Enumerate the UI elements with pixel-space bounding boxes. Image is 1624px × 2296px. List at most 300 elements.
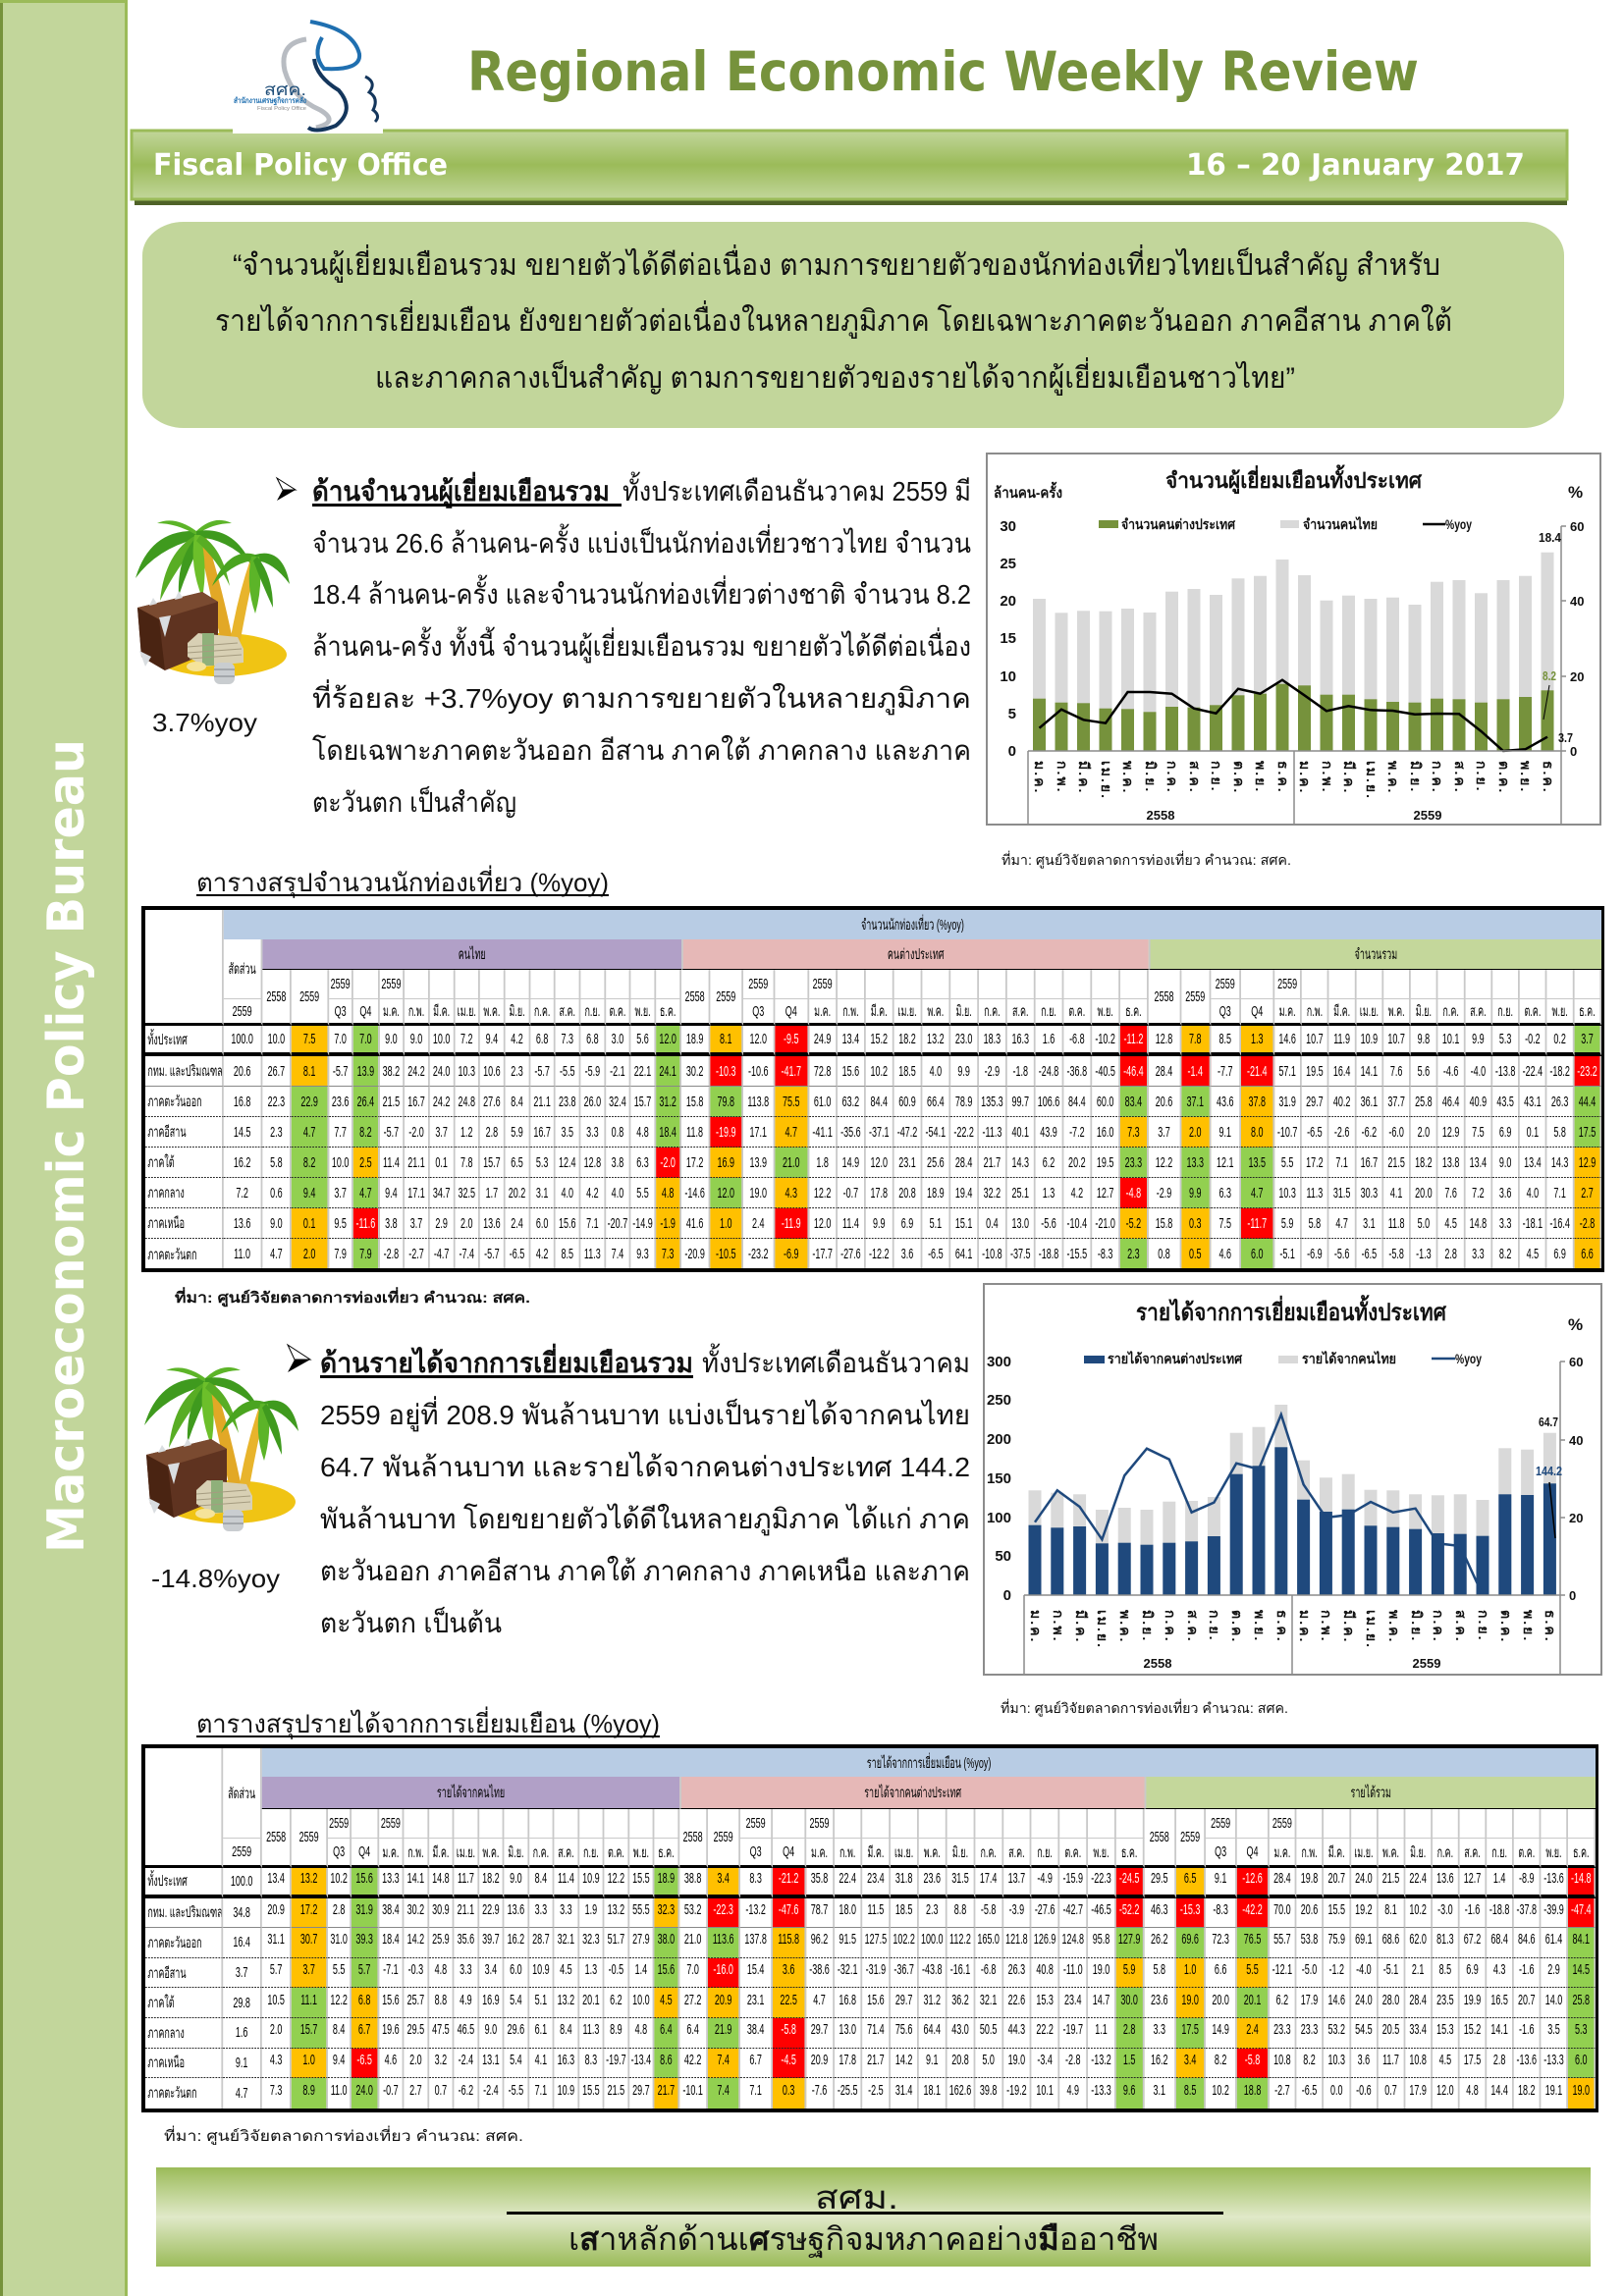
table: tourist numbers (%yoy): 3.6 <box>901 1246 913 1262</box>
month labels: ต.ค. <box>1229 1610 1245 1643</box>
table: tourist numbers (%yoy): 79.8 <box>717 1094 734 1109</box>
table: tourism receipts (%yoy): 20.9 <box>811 2052 828 2068</box>
month labels: พ.ย. <box>1252 1610 1268 1642</box>
table: tourist numbers (%yoy): มี.ค. <box>871 1003 888 1020</box>
table: tourism receipts (%yoy): ก.ค. <box>1437 1843 1453 1861</box>
table: tourist numbers (%yoy): -5.5 <box>560 1062 574 1080</box>
table: tourism receipts (%yoy): 23.4 <box>867 1870 885 1887</box>
table: tourist numbers (%yoy): 18.9 <box>927 1184 945 1201</box>
table: tourist numbers (%yoy): 83.4 <box>1125 1094 1142 1109</box>
table: tourism receipts (%yoy): ภาคอีสาน <box>147 1965 187 1982</box>
table: tourist numbers (%yoy): ภาคตะวันออก <box>147 1094 202 1110</box>
table: tourism receipts (%yoy): ม.ค. <box>1273 1843 1290 1861</box>
table: tourism receipts (%yoy): 4.7 <box>813 1992 826 2008</box>
table: tourist numbers (%yoy): 31.9 <box>1278 1094 1296 1109</box>
chart: visitors nationwide <box>987 454 1600 825</box>
table: tourism receipts (%yoy): 16.8 <box>839 1992 856 2008</box>
table: tourism receipts (%yoy): 23.3 <box>1301 2021 1318 2038</box>
table: tourism receipts (%yoy): 11.5 <box>867 1901 884 1918</box>
month labels: ส.ค. <box>1453 1610 1469 1643</box>
table: tourism receipts (%yoy): 1.4 <box>1493 1870 1505 1887</box>
table: tourism receipts (%yoy): 55.7 <box>1273 1931 1291 1948</box>
table: tourism receipts (%yoy): พ.ค. <box>1382 1843 1399 1861</box>
table: tourist numbers (%yoy): 106.6 <box>1038 1094 1059 1109</box>
table: tourism receipts (%yoy): 0.3 <box>783 2082 794 2099</box>
left axis labels: 20 <box>1000 593 1016 610</box>
table: tourist numbers (%yoy): -37.5 <box>1010 1246 1030 1262</box>
table: tourism receipts (%yoy): 16.5 <box>1490 1992 1508 2008</box>
table: tourism receipts (%yoy): 2559 <box>1211 1815 1230 1832</box>
table: tourism receipts (%yoy): -5.0 <box>1302 1961 1317 1978</box>
table: tourist numbers (%yoy): 5.8 <box>1553 1123 1566 1141</box>
table: tourism receipts (%yoy): 4.3 <box>270 2052 282 2068</box>
table: tourism receipts (%yoy): 13.6 <box>508 1901 524 1918</box>
table: tourist numbers (%yoy): 13.4 <box>1524 1154 1542 1170</box>
table: tourist numbers (%yoy): 4.0 <box>930 1062 942 1080</box>
table: tourism receipts (%yoy): 2559 <box>1272 1815 1292 1832</box>
table: tourism receipts (%yoy): 4.3 <box>1493 1961 1505 1978</box>
table: tourist numbers (%yoy): 10.7 <box>1387 1031 1405 1047</box>
table: tourist numbers (%yoy): 14.1 <box>1361 1062 1378 1080</box>
table: tourist numbers (%yoy): -27.6 <box>840 1246 861 1262</box>
month labels: ม.ค. <box>1028 1610 1044 1643</box>
table: tourist numbers (%yoy): 15.8 <box>686 1094 703 1109</box>
month labels: พ.ค. <box>1117 1610 1133 1643</box>
table: tourism receipts (%yoy): -19.7 <box>606 2052 626 2068</box>
table: tourism receipts (%yoy): ทั้งประเทศ <box>147 1873 188 1890</box>
month labels: ส.ค. <box>1452 761 1468 794</box>
table: tourism receipts (%yoy): 16.2 <box>508 1931 524 1948</box>
table: tourism receipts (%yoy): มิ.ย. <box>1410 1843 1426 1861</box>
table: tourism receipts (%yoy): 13.7 <box>1008 1870 1025 1887</box>
data labels: 8.2 <box>1543 668 1556 683</box>
table: tourist numbers (%yoy): 0.2 <box>1553 1031 1566 1047</box>
table: tourist numbers (%yoy): 16.9 <box>717 1154 734 1170</box>
header band: Fiscal Policy Office and date <box>132 131 1567 205</box>
table: tourist numbers (%yoy): -21.0 <box>1095 1215 1115 1231</box>
month labels: ธ.ค. <box>1274 1610 1290 1643</box>
table: tourism receipts (%yoy): พ.ค. <box>924 1843 941 1861</box>
table: tourist numbers (%yoy): 13.2 <box>927 1031 945 1047</box>
table: tourist numbers (%yoy): ภาคกลาง <box>147 1185 185 1201</box>
month labels: มิ.ย. <box>1140 1610 1156 1642</box>
table: tourist numbers (%yoy): 100.0 <box>231 1031 253 1047</box>
table: tourism receipts (%yoy): 54.5 <box>1355 2021 1373 2038</box>
table: tourist numbers (%yoy): ภาคเหนือ <box>147 1215 185 1232</box>
table: tourist numbers (%yoy): -23.2 <box>1577 1062 1597 1080</box>
table: tourist numbers (%yoy): 3.7 <box>435 1123 448 1141</box>
table: tourist numbers (%yoy): -19.9 <box>716 1123 736 1141</box>
table: tourist numbers (%yoy): จำนวนนักท่องเที่ยว (%yoy) <box>861 917 964 934</box>
table: tourist numbers (%yoy): มี.ค. <box>1333 1003 1350 1020</box>
table: tourist numbers (%yoy): -4.7 <box>434 1246 449 1262</box>
table: tourist numbers (%yoy): 3.7 <box>410 1215 422 1231</box>
table: tourist numbers (%yoy): 43.6 <box>1217 1094 1233 1109</box>
table: tourist numbers (%yoy): ส.ค. <box>1470 1003 1487 1020</box>
table: tourism receipts (%yoy): 15.6 <box>658 1961 675 1978</box>
table: tourism receipts (%yoy): 3.6 <box>1358 2052 1370 2068</box>
table: tourist numbers (%yoy): 7.6 <box>1444 1184 1457 1201</box>
table: tourism receipts (%yoy): 22.2 <box>1036 2021 1054 2038</box>
table: tourist numbers (%yoy): -15.5 <box>1067 1246 1087 1262</box>
table: tourism receipts (%yoy): พ.ย. <box>1545 1843 1562 1861</box>
table: tourist numbers (%yoy): -10.3 <box>716 1062 736 1080</box>
table: tourism receipts (%yoy): 15.6 <box>382 1992 400 2008</box>
month labels: ม.ค. <box>1297 761 1313 794</box>
table: tourist numbers (%yoy): 14.3 <box>1011 1154 1029 1170</box>
table: tourism receipts (%yoy): -3.4 <box>1037 2052 1053 2068</box>
table: tourist numbers (%yoy): 16.7 <box>407 1094 425 1109</box>
month labels: ส.ค. <box>1185 1610 1201 1643</box>
month labels: มี.ค. <box>1341 1610 1357 1643</box>
table: tourist numbers (%yoy): 3.3 <box>1472 1246 1485 1262</box>
table: tourist numbers (%yoy): 23.0 <box>955 1031 972 1047</box>
left axis labels: 100 <box>987 1510 1011 1526</box>
table: tourist numbers (%yoy): 6.9 <box>1553 1246 1566 1262</box>
table: tourism receipts (%yoy): -5.8 <box>781 2021 796 2038</box>
foreign receipt bars <box>1029 1447 1556 1595</box>
table: tourism receipts (%yoy): -13.2 <box>745 1901 766 1918</box>
table: tourism receipts (%yoy): 21.1 <box>458 1901 474 1918</box>
table: tourist numbers (%yoy): 13.6 <box>234 1215 250 1231</box>
quote text lines: และภาคกลางเป็นสำคัญ ตามการขยายตัวของรายได้จากผู้เยี่ยมเยือนชาวไทย” <box>375 357 1295 396</box>
table: tourism receipts (%yoy): 6.2 <box>610 1992 623 2008</box>
header band: Fiscal Policy Office and date: Fiscal Policy Office <box>153 148 448 183</box>
table: tourism receipts (%yoy): 35.8 <box>811 1870 828 1887</box>
table: tourist numbers (%yoy): พ.ค. <box>927 1003 944 1020</box>
month labels: ก.พ. <box>1051 1610 1066 1642</box>
table: tourism receipts (%yoy): 29.7 <box>895 1992 912 2008</box>
table: tourism receipts (%yoy): 20.9 <box>267 1901 285 1918</box>
table: tourism receipts (%yoy): 51.7 <box>608 1931 624 1948</box>
table: tourism receipts (%yoy): 23.6 <box>924 1870 941 1887</box>
table: tourism receipts (%yoy): 23.1 <box>747 1992 764 2008</box>
table: tourist numbers (%yoy): 7.2 <box>1472 1184 1485 1201</box>
table: tourism receipts (%yoy): Q4 <box>783 1843 794 1860</box>
table: tourist numbers (%yoy): 31.2 <box>659 1094 677 1109</box>
table: tourism receipts (%yoy): 29.7 <box>811 2021 828 2038</box>
table: tourist numbers (%yoy): 8.2 <box>303 1154 315 1170</box>
table: tourist numbers (%yoy): 11.3 <box>1306 1184 1323 1201</box>
table: tourism receipts (%yoy): 8.6 <box>660 2052 673 2068</box>
table: tourism receipts (%yoy): -22.3 <box>713 1901 733 1918</box>
table: tourism receipts (%yoy): 3.3 <box>460 1961 472 1978</box>
table: tourist numbers (%yoy): 16.4 <box>1333 1062 1350 1080</box>
table: tourism receipts (%yoy): -4.0 <box>1356 1961 1372 1978</box>
table: tourist numbers (%yoy): 17.1 <box>407 1184 425 1201</box>
table: tourism receipts (%yoy): 68.4 <box>1490 1931 1508 1948</box>
table: tourism receipts (%yoy): 22.4 <box>839 1870 856 1887</box>
table: tourism receipts (%yoy): -7.6 <box>812 2082 827 2099</box>
table: tourism receipts (%yoy): 11.7 <box>458 1870 474 1887</box>
table: tourism receipts (%yoy): 24.0 <box>1355 1992 1373 2008</box>
table: tourism receipts (%yoy): 14.4 <box>1490 2082 1508 2099</box>
table: tourist numbers (%yoy): -5.2 <box>1126 1215 1141 1231</box>
table: tourist numbers (%yoy): มี.ค. <box>433 1003 450 1020</box>
table: tourist numbers (%yoy): 0.4 <box>986 1215 999 1231</box>
table: tourist numbers (%yoy): 8.0 <box>1251 1123 1264 1141</box>
table: tourism receipts (%yoy): ก.ย. <box>1037 1843 1053 1861</box>
month labels: พ.ค. <box>1120 761 1136 794</box>
table: tourist numbers (%yoy): -12.2 <box>869 1246 889 1262</box>
table: tourism receipts (%yoy): 5.5 <box>1246 1961 1259 1978</box>
table: tourism receipts (%yoy): 17.2 <box>300 1901 317 1918</box>
table: tourist numbers (%yoy): 22.9 <box>300 1094 318 1109</box>
legend: จำนวนคนต่างประเทศ <box>1121 516 1236 532</box>
table: tourism receipts (%yoy): 6.0 <box>1575 2052 1588 2068</box>
table: tourism receipts (%yoy): 9.1 <box>926 2052 939 2068</box>
table: tourism receipts (%yoy): 4.6 <box>385 2052 397 2068</box>
left axis labels <box>1000 518 1016 760</box>
table: tourism receipts (%yoy): 16.3 <box>558 2052 574 2068</box>
table: tourism receipts (%yoy): 31.5 <box>951 1870 969 1887</box>
table: tourist numbers (%yoy): สัดส่วน <box>229 961 256 978</box>
table: tourism receipts (%yoy): 17.8 <box>839 2052 856 2068</box>
table: tourism receipts (%yoy): 15.3 <box>1036 1992 1054 2008</box>
text block: visitors: ทั้งประเทศเดือนธันวาคม 2559 มี <box>623 471 971 507</box>
table: tourism receipts (%yoy): 6.0 <box>510 1961 522 1978</box>
table: tourism receipts (%yoy): 7.3 <box>270 2082 282 2099</box>
table: tourist numbers (%yoy): 22.1 <box>634 1062 651 1080</box>
table: tourism receipts (%yoy): 1.4 <box>635 1961 647 1978</box>
table: tourist numbers (%yoy): 9.4 <box>385 1184 398 1201</box>
table: tourism receipts (%yoy): พ.ย. <box>1093 1843 1110 1861</box>
table: tourist numbers (%yoy): Q3 <box>752 1003 764 1019</box>
table: tourist numbers (%yoy): 4.8 <box>636 1123 649 1141</box>
table: tourism receipts (%yoy): 14.8 <box>432 1870 450 1887</box>
table: tourism receipts (%yoy): 19.8 <box>1301 1870 1318 1887</box>
table: tourism receipts (%yoy): 67.2 <box>1464 1931 1481 1948</box>
table: tourist numbers (%yoy): พ.ค. <box>1388 1003 1405 1020</box>
table: tourist numbers (%yoy): 4.2 <box>536 1246 548 1262</box>
table: tourism receipts (%yoy): 8.2 <box>1303 2052 1316 2068</box>
table: tourism receipts (%yoy): ภาคใต้ <box>147 1995 175 2011</box>
table: tourism receipts (%yoy): -6.5 <box>1302 2082 1317 2099</box>
month labels: มิ.ย. <box>1143 761 1159 793</box>
table: tourism receipts (%yoy): 42.2 <box>684 2052 701 2068</box>
table: tourist numbers (%yoy): 11.4 <box>383 1154 400 1170</box>
table: tourist numbers (%yoy): 7.5 <box>1472 1123 1485 1141</box>
table: tourist numbers (%yoy): 4.7 <box>270 1246 283 1262</box>
table: tourism receipts (%yoy): 5.1 <box>535 1992 547 2008</box>
table: tourist numbers (%yoy): 20.6 <box>234 1062 250 1080</box>
month labels: ก.ค. <box>1430 761 1445 794</box>
table: tourism receipts (%yoy) <box>141 1744 1598 2112</box>
table: tourist numbers (%yoy): พ.ย. <box>1098 1003 1113 1020</box>
table: tourism receipts (%yoy): ต.ค. <box>608 1843 624 1861</box>
table: tourist numbers (%yoy): 20.8 <box>898 1184 916 1201</box>
table: tourist numbers (%yoy): 11.8 <box>686 1123 703 1141</box>
table: tourism receipts (%yoy): 29.7 <box>632 2082 650 2099</box>
table: tourism receipts (%yoy): -46.5 <box>1091 1901 1111 1918</box>
table: tourist numbers (%yoy): -7.4 <box>460 1246 474 1262</box>
table: tourist numbers (%yoy): -1.3 <box>1416 1246 1432 1262</box>
table: tourist numbers (%yoy): 18.3 <box>984 1031 1001 1047</box>
table: tourism receipts (%yoy): 39.7 <box>482 1931 500 1948</box>
table: tourism receipts (%yoy): -0.3 <box>408 1961 423 1978</box>
table: tourism receipts (%yoy): -4.5 <box>781 2052 796 2068</box>
table: tourism receipts (%yoy): 53.8 <box>1301 1931 1318 1948</box>
logo: FPO <box>233 18 383 133</box>
table: tourist numbers (%yoy): 4.5 <box>1527 1246 1539 1262</box>
table: tourism receipts (%yoy): 30.0 <box>1120 1992 1138 2008</box>
table: tourist numbers (%yoy): พ.ค. <box>483 1003 500 1020</box>
table: tourist numbers (%yoy): -5.1 <box>1279 1246 1295 1262</box>
table: tourism receipts (%yoy): 165.0 <box>977 1931 1000 1948</box>
table: tourism receipts (%yoy): 84.1 <box>1573 1931 1590 1948</box>
table: tourism receipts (%yoy): 17.5 <box>1464 2052 1481 2068</box>
table: tourist numbers (%yoy): -14.9 <box>632 1215 653 1231</box>
table: tourism receipts (%yoy): 31.0 <box>330 1931 348 1948</box>
table: tourist numbers (%yoy): 5.9 <box>1281 1215 1293 1231</box>
quote text lines <box>215 244 1452 396</box>
table: tourism receipts (%yoy): 9.0 <box>510 1870 522 1887</box>
thai receipt bars <box>1029 1405 1556 1595</box>
chart title: รายได้จากการเยี่ยมเยือนทั้งประเทศ <box>1136 1294 1447 1326</box>
table: tourism receipts (%yoy): 17.9 <box>1301 1992 1318 2008</box>
table: tourism receipts (%yoy): 9.0 <box>485 2021 497 2038</box>
legend: %yoy <box>1445 516 1472 532</box>
thai visitor bars <box>1033 553 1553 751</box>
table: tourism receipts (%yoy): 3.1 <box>1154 2082 1165 2099</box>
table: tourism receipts (%yoy): 20.1 <box>1244 1992 1261 2008</box>
table: tourist numbers (%yoy): -17.7 <box>812 1246 833 1262</box>
table: tourism receipts (%yoy): 3.3 <box>560 1901 572 1918</box>
table: tourist numbers (%yoy): -10.7 <box>1277 1123 1297 1141</box>
legend <box>1099 515 1472 532</box>
table: tourist numbers (%yoy): 9.0 <box>385 1031 398 1047</box>
left axis labels: 50 <box>995 1548 1011 1565</box>
yoy figure: receipts: -14.8%yoy <box>151 1564 280 1593</box>
table: tourism receipts (%yoy): 121.8 <box>1005 1931 1028 1948</box>
month labels: มี.ค. <box>1076 761 1092 794</box>
table: tourist numbers (%yoy): เม.ย. <box>458 1003 476 1020</box>
left axis labels: 25 <box>1000 556 1016 572</box>
table: tourist numbers (%yoy): 3.3 <box>1499 1215 1511 1231</box>
table: tourism receipts (%yoy): 40.8 <box>1036 1961 1054 1978</box>
table: tourist numbers (%yoy): 7.2 <box>236 1184 248 1201</box>
text block: visitors <box>312 471 971 818</box>
table: tourism receipts (%yoy): 9.4 <box>333 2052 345 2068</box>
table: tourism receipts (%yoy): 31.8 <box>895 1870 912 1887</box>
table: tourism receipts (%yoy): 1.3 <box>585 1961 597 1978</box>
table: tourist numbers (%yoy): 21.1 <box>533 1094 551 1109</box>
table: tourism receipts (%yoy): 76.5 <box>1244 1931 1261 1948</box>
logo: FPO: สศค. <box>264 80 306 99</box>
table: tourist numbers (%yoy): 13.4 <box>1470 1154 1487 1170</box>
table: tourist numbers (%yoy): 2.8 <box>1444 1246 1457 1262</box>
table: tourism receipts (%yoy): -12.6 <box>1242 1870 1263 1887</box>
table: tourism receipts (%yoy): 4.8 <box>1466 2082 1479 2099</box>
table: tourist numbers (%yoy): 40.9 <box>1470 1094 1487 1109</box>
table: tourist numbers (%yoy): 12.9 <box>1579 1154 1596 1170</box>
month labels: ธ.ค. <box>1543 1610 1558 1643</box>
table: tourist numbers (%yoy): 32.5 <box>459 1184 475 1201</box>
table: tourist numbers (%yoy): 12.7 <box>1097 1184 1113 1201</box>
legend <box>1084 1350 1482 1366</box>
table: tourism receipts (%yoy): 10.8 <box>1409 2052 1427 2068</box>
table: tourism receipts (%yoy): 8.8 <box>435 1992 447 2008</box>
table: tourist numbers (%yoy): 2.0 <box>460 1215 473 1231</box>
table: tourism receipts (%yoy): 28.0 <box>1382 1992 1399 2008</box>
table: tourist numbers (%yoy): -10.2 <box>1095 1031 1115 1047</box>
table: tourism receipts (%yoy): มี.ค. <box>432 1843 449 1861</box>
table: tourist numbers (%yoy): 7.7 <box>334 1123 347 1141</box>
month labels: ธ.ค. <box>1275 761 1291 794</box>
table: tourist numbers (%yoy): 21.5 <box>1387 1154 1405 1170</box>
table: tourism receipts (%yoy): 7.4 <box>717 2082 730 2099</box>
table: tourist numbers (%yoy): 28.4 <box>1156 1062 1172 1080</box>
table: tourism receipts (%yoy): กทม. และปริมณฑล <box>147 1904 223 1921</box>
table: tourism receipts (%yoy): 31.4 <box>895 2082 912 2099</box>
table: tourist numbers (%yoy): 2559 <box>1277 976 1297 992</box>
table: tourist numbers (%yoy): -41.1 <box>812 1123 833 1141</box>
table: tourism receipts (%yoy): 4.7 <box>236 2085 247 2102</box>
table: tourism receipts (%yoy): 10.2 <box>1212 2082 1229 2099</box>
table: tourist numbers (%yoy): 64.1 <box>955 1246 972 1262</box>
year labels: 2559 <box>1414 808 1441 823</box>
sidebar: Macroeconomic Policy Bureau: Macroeconomic Policy Bureau <box>37 739 96 1553</box>
table: tourist numbers (%yoy): 9.3 <box>636 1246 649 1262</box>
table: tourism receipts (%yoy): 11.0 <box>331 2082 348 2099</box>
table: tourism receipts (%yoy): 44.3 <box>1008 2021 1025 2038</box>
table: tourism receipts (%yoy): 5.9 <box>1123 1961 1135 1978</box>
chart: tourism receipts nationwide <box>984 1284 1601 1675</box>
table: tourist numbers (%yoy): 11.4 <box>842 1215 859 1231</box>
month labels: พ.ย. <box>1253 761 1269 793</box>
table: tourist numbers (%yoy): 9.8 <box>1418 1031 1430 1047</box>
table: tourism receipts (%yoy): 10.9 <box>558 2082 574 2099</box>
table: tourism receipts (%yoy): 13.6 <box>1436 1870 1454 1887</box>
table: tourist numbers (%yoy): ทั้งประเทศ <box>147 1031 188 1048</box>
table: tourist numbers (%yoy): 16.7 <box>533 1123 551 1141</box>
table: tourist numbers (%yoy): -11.2 <box>1123 1031 1143 1047</box>
table: tourist numbers (%yoy): -10.4 <box>1067 1215 1087 1231</box>
table: tourist numbers (%yoy): 38.2 <box>383 1062 400 1080</box>
table: tourist numbers (%yoy): 24.0 <box>433 1062 450 1080</box>
table: tourist numbers (%yoy): 12.2 <box>814 1184 831 1201</box>
table: tourism receipts (%yoy): 55.5 <box>632 1901 650 1918</box>
table: tourism receipts (%yoy): 11.4 <box>558 1870 574 1887</box>
table: tourism receipts (%yoy): 75.9 <box>1327 1931 1345 1948</box>
table: tourism receipts (%yoy): 2559 <box>714 1829 733 1845</box>
table: tourist numbers (%yoy): 12.8 <box>584 1154 601 1170</box>
table: tourism receipts (%yoy): 25.8 <box>1573 1992 1590 2008</box>
table: tourism receipts (%yoy): 10.9 <box>582 1870 600 1887</box>
table: tourism receipts (%yoy): 2.8 <box>333 1901 345 1918</box>
table: tourism receipts (%yoy): 20.7 <box>1327 1870 1345 1887</box>
table: tourist numbers (%yoy): 3.7 <box>334 1184 347 1201</box>
table: tourist numbers (%yoy): ต.ค. <box>1068 1003 1085 1020</box>
table: tourism receipts (%yoy): Q3 <box>1215 1843 1226 1860</box>
table: tourism receipts (%yoy): -10.1 <box>682 2082 703 2099</box>
table: tourist numbers (%yoy): 5.5 <box>1281 1154 1293 1170</box>
table: tourist numbers (%yoy): 4.1 <box>1390 1184 1402 1201</box>
table: tourism receipts (%yoy): -15.9 <box>1063 1870 1083 1887</box>
table: tourist numbers (%yoy): เม.ย. <box>1360 1003 1379 1020</box>
table: tourism receipts (%yoy): 2558 <box>1150 1829 1169 1845</box>
table: tourism receipts (%yoy): 8.3 <box>585 2052 597 2068</box>
footer band: slogan: เสาหลักด้านเศรษฐกิจมหภาคอย่างมืออาชีพ <box>568 2221 1159 2259</box>
table: tourist numbers (%yoy): -23.2 <box>748 1246 769 1262</box>
table: tourism receipts (%yoy): -39.9 <box>1543 1901 1564 1918</box>
table: tourist numbers (%yoy): พ.ย. <box>634 1003 651 1020</box>
table: tourist numbers (%yoy): 21.7 <box>984 1154 1001 1170</box>
table: tourist numbers (%yoy): 13.9 <box>749 1154 767 1170</box>
table: tourist numbers (%yoy): -2.0 <box>660 1154 676 1170</box>
table: tourism receipts (%yoy): 4.1 <box>535 2052 547 2068</box>
text block: visitors: ด้านจำนวนผู้เยี่ยมเยือนรวม <box>312 471 610 508</box>
